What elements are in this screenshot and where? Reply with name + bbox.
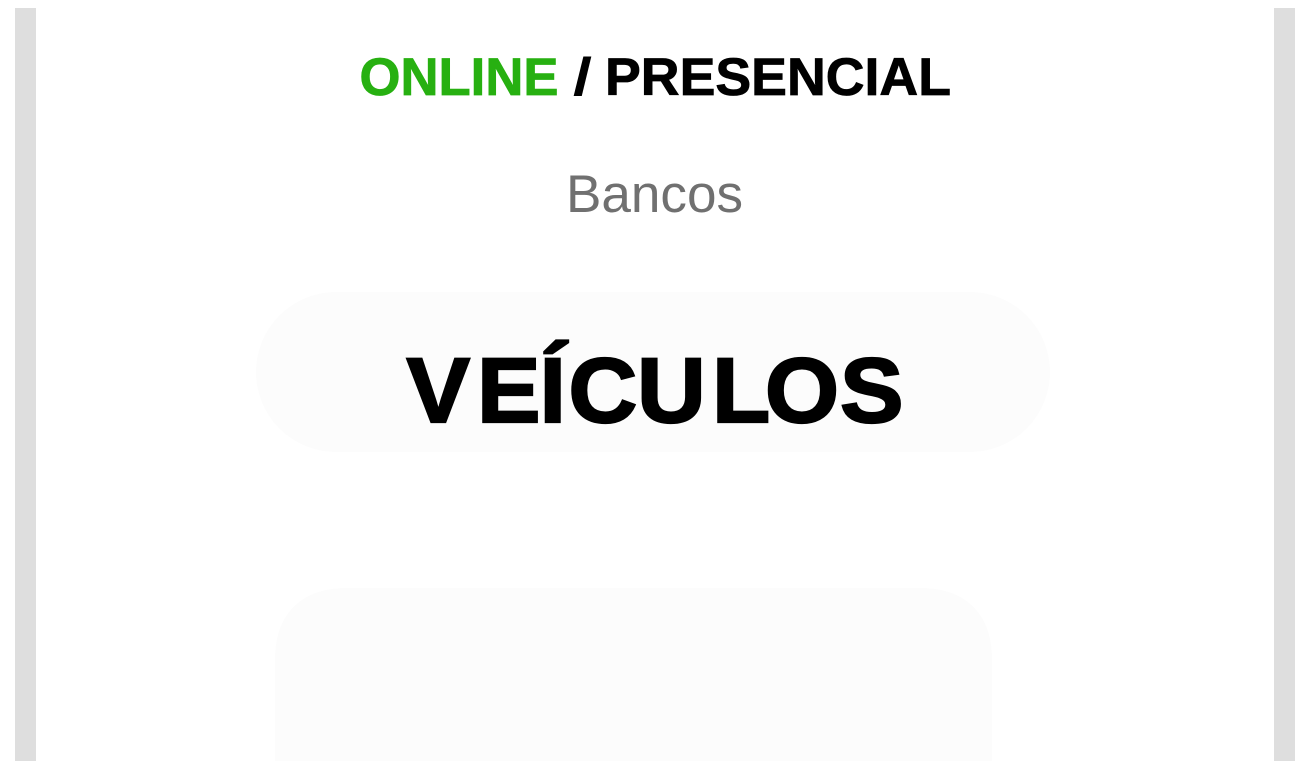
heading: online / presencial: PRESENCIAL [605, 48, 951, 107]
panel: empty lower card [275, 588, 992, 761]
right side bar [1274, 8, 1295, 761]
heading: online / presencial: / [573, 48, 592, 107]
heading: online / presencial [360, 48, 951, 107]
subheading: bancos: Bancos [566, 165, 743, 224]
heading: online / presencial: ONLINE [360, 48, 558, 107]
panel: veículos pill [256, 292, 1050, 452]
left side bar [15, 8, 36, 761]
veículos label: VEÍCULOS [407, 338, 904, 442]
